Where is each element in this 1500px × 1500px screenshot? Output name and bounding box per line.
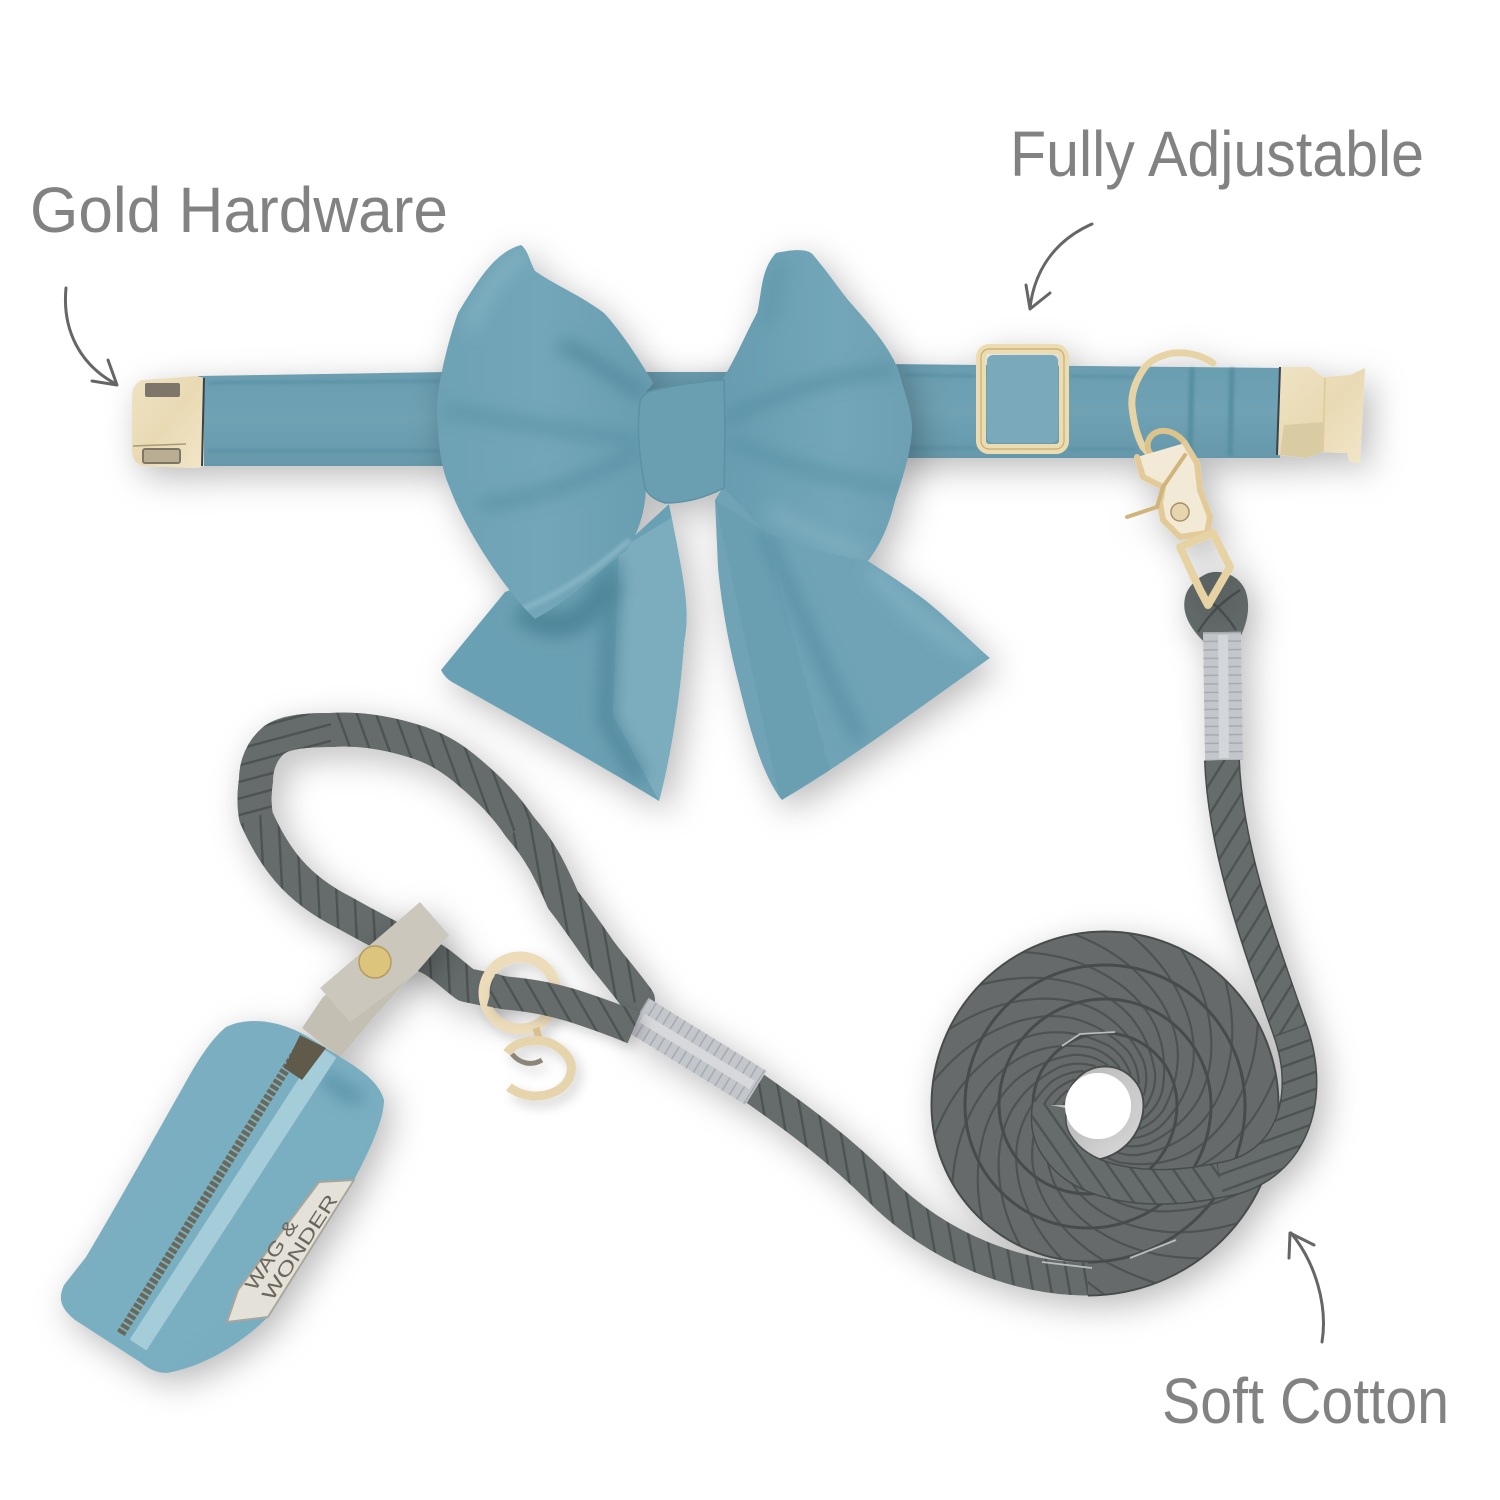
label: Soft Cotton: Soft Cotton [1162,1365,1449,1437]
group: key ring charm [484,957,571,1096]
zipper tape [138,1052,328,1345]
left side-release buckle [132,376,204,468]
charm [507,1040,571,1096]
frayed light threads in coil [1042,1032,1176,1268]
silver whipping: lower [638,1015,756,1088]
rope: top knot [1184,572,1248,642]
charm inner tone [512,1054,542,1063]
rope passing through the ring [491,990,634,1028]
group: leash rope with coil [254,572,1313,1313]
brand label [227,1180,354,1322]
strap stitched folds [1190,368,1232,456]
arrow: to adjuster [1026,224,1092,309]
bow tail left [430,500,700,810]
slider inner edge [981,349,1064,449]
rope: handle loop [254,730,638,1000]
strap inside slider [987,355,1058,443]
adjuster slider [981,349,1064,449]
group: sailor bow [430,240,1000,810]
coil centre hole [1065,1073,1131,1139]
label: Fully Adjustable: Fully Adjustable [1010,118,1424,190]
group: waste bag pouch [61,902,449,1373]
pouch body [61,1021,384,1373]
bow wing left [430,240,660,630]
bow wing right [715,245,920,570]
strap behind knot [440,372,910,402]
leather flap [320,902,449,1022]
collar strap right [885,364,1285,458]
collar strap left [198,372,445,466]
zipper teeth [120,1040,304,1335]
bow centre knot [638,380,725,503]
zipper pull [284,1035,326,1080]
D-ring [1132,353,1213,460]
brass snap [359,946,391,978]
brand label: WONDER [259,1191,343,1305]
label: Gold Hardware: Gold Hardware [30,174,448,246]
rope: run from sleeve to coil [750,1085,1088,1279]
right side-release buckle [1277,367,1365,463]
charm connector [536,1028,540,1042]
pouch shading [325,1075,362,1098]
swivel clasp [1127,431,1230,605]
rope: spiral coil [920,922,1282,1323]
silver whipping: upper [1222,632,1224,760]
bow tail right [700,470,1000,810]
leather loop behind strap [302,930,449,1058]
metal ring [484,957,556,1029]
group: collar [132,349,1365,605]
brand label: WAG & [242,1216,303,1295]
strap stitch lines [208,375,1135,451]
arrow: to rope [1289,1233,1323,1342]
arrow: to gold buckle [65,288,117,385]
rope: strand from clip into coil [1049,760,1299,1187]
